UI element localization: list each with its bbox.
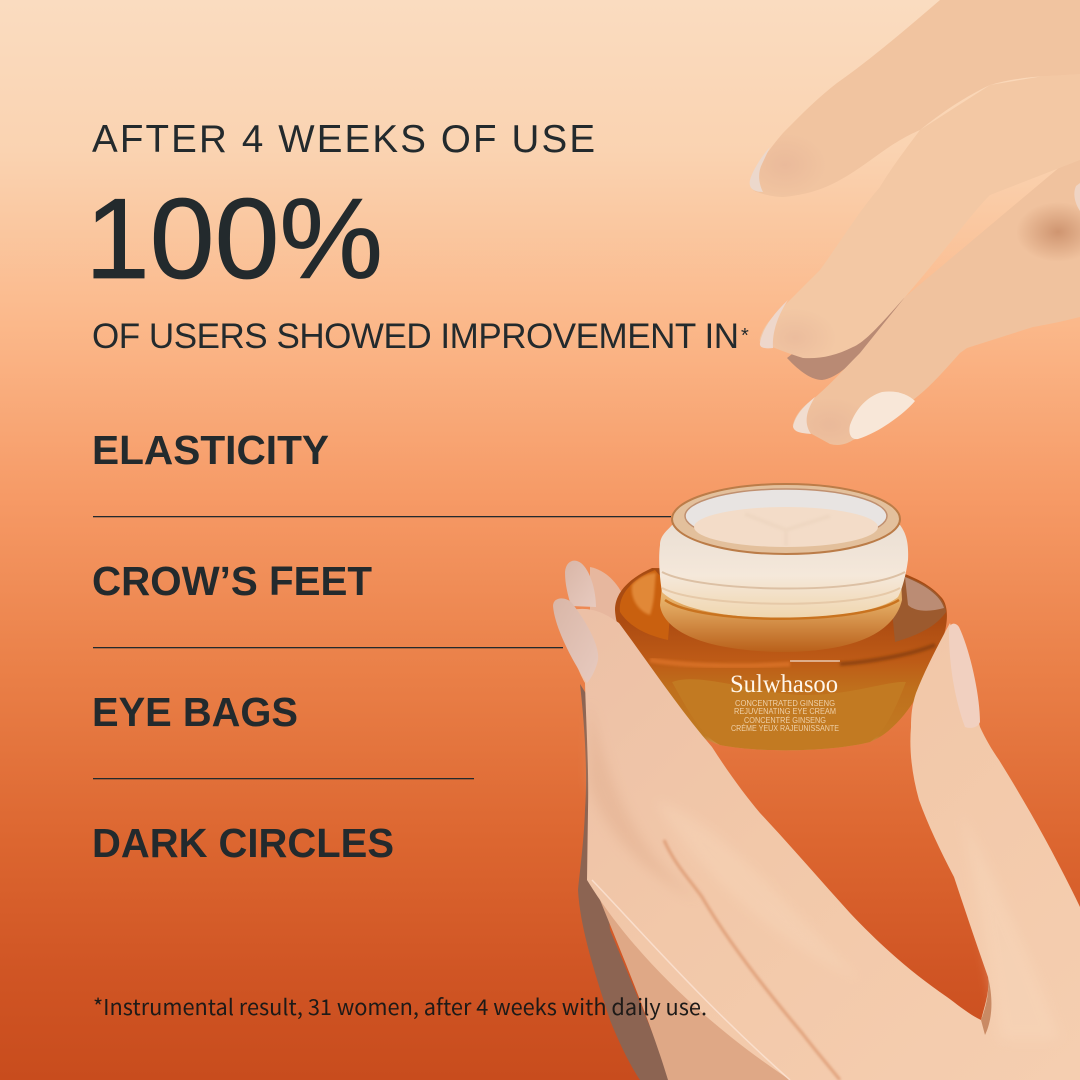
rim — [672, 484, 900, 554]
cream surface — [694, 507, 878, 547]
fingertip shading — [778, 159, 834, 428]
index fingernail — [553, 598, 598, 683]
icon: cream on fingertip — [849, 391, 915, 439]
footnote: *Instrumental result, 31 women, after 4 weeks with daily use. — [93, 990, 707, 1022]
icon: lower hand holding jar — [553, 598, 1080, 1080]
list item: crow's feet: CROW’S FEET — [92, 558, 372, 604]
jar label: Sulwhasoo — [730, 671, 838, 698]
jar label: REJUVENATING EYE CREAM — [734, 707, 836, 716]
icon: upper hand reaching toward jar — [743, 0, 1080, 453]
list item: dark circles: DARK CIRCLES — [92, 820, 394, 866]
divider lines — [93, 516, 671, 779]
asterisk: * — [741, 325, 749, 347]
jar label: CONCENTRÉ GINSENG — [744, 716, 826, 725]
subheading: of users showed improvement: OF USERS SHOWED IMPROVEMENT IN — [92, 317, 739, 356]
icon: back finger behind jar — [565, 561, 625, 640]
jar label: CRÈME YEUX RAJEUNISSANTE — [731, 724, 839, 733]
jar label — [730, 671, 839, 733]
big number: 100%: 100% — [85, 176, 383, 303]
thumb nail — [949, 624, 980, 728]
neck — [659, 525, 908, 618]
list item: eye bags: EYE BAGS — [92, 689, 298, 735]
heading: after 4 weeks of use: AFTER 4 WEEKS OF USE — [92, 118, 595, 161]
jar label: CONCENTRATED GINSENG — [735, 699, 835, 708]
icon: amber glass jar — [615, 484, 947, 750]
list item: elasticity: ELASTICITY — [92, 427, 329, 473]
